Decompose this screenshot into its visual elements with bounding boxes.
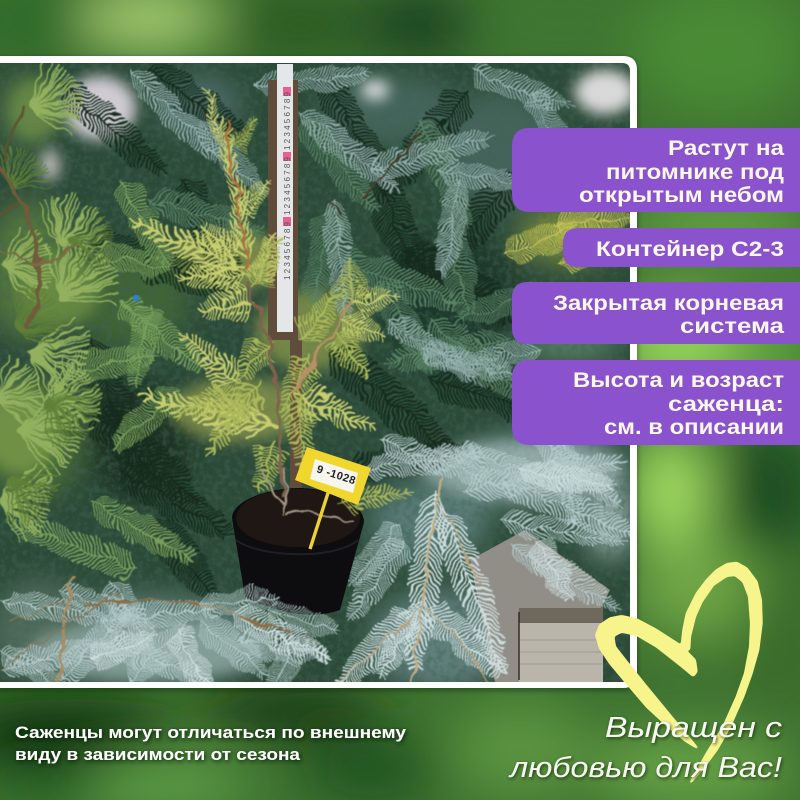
slogan: Выращен с <box>605 712 783 744</box>
info panel: height and age: см. в описании <box>604 416 784 439</box>
disclaimer note: Саженцы могут отличаться по внешнему <box>15 723 407 742</box>
slogan <box>508 712 783 784</box>
post and measuring ruler: 123456789 <box>283 221 292 280</box>
icon: yellow hand-drawn heart <box>596 563 762 783</box>
wooden crate <box>470 530 610 682</box>
green boughs, left and centre <box>3 173 214 585</box>
info panel: height and age <box>512 360 800 445</box>
post and measuring ruler: 123456789 <box>283 156 292 215</box>
slogan: любовью для Вас! <box>508 752 782 784</box>
thuja foliage and stem <box>122 82 416 520</box>
pale sky patches <box>40 70 635 181</box>
yellow spruce at right edge <box>504 212 630 275</box>
info panel: grown outdoors <box>512 128 800 212</box>
dark spruce boughs <box>50 56 570 607</box>
needle texture <box>0 63 630 682</box>
yellow plant label: 9 -1028 <box>315 463 357 487</box>
organic foliage layer <box>0 53 644 700</box>
bright foliage glow <box>0 80 620 680</box>
mid green boughs <box>146 111 545 409</box>
yellow plant label <box>295 447 371 549</box>
info panel: closed root system <box>512 282 800 344</box>
disclaimer note: виду в зависимости от сезона <box>15 745 301 764</box>
disclaimer note <box>15 723 407 764</box>
white photo card <box>0 56 637 688</box>
info panel: closed root system: Закрытая корневая <box>553 292 784 315</box>
tan spruce twigs <box>0 133 490 682</box>
pine tufts on left edge <box>0 63 120 544</box>
plant pot with soil <box>232 488 364 615</box>
info panel: closed root system: система <box>680 315 784 338</box>
blue-grey boughs <box>121 59 590 393</box>
photo tonal base <box>0 63 634 690</box>
info panel: container <box>563 228 800 267</box>
info panel: height and age: Высота и возраст <box>573 369 784 392</box>
post and measuring ruler: 123456789 <box>283 91 292 150</box>
pine trunk <box>0 110 78 326</box>
info panel: grown outdoors: открытым небом <box>579 184 784 207</box>
info panel: grown outdoors: питомнике под <box>606 161 784 184</box>
info panel: grown outdoors: Растут на <box>668 137 784 160</box>
info panel: container: Контейнер С2-3 <box>596 238 784 261</box>
post and measuring ruler <box>268 64 302 490</box>
blue tag dot <box>133 295 139 301</box>
info panel: height and age: саженца: <box>668 393 784 416</box>
pale spruce boughs, lower area <box>0 433 630 682</box>
photo: potted thuja among spruce branches <box>0 53 644 700</box>
boughs overlapping the pot <box>199 585 346 643</box>
